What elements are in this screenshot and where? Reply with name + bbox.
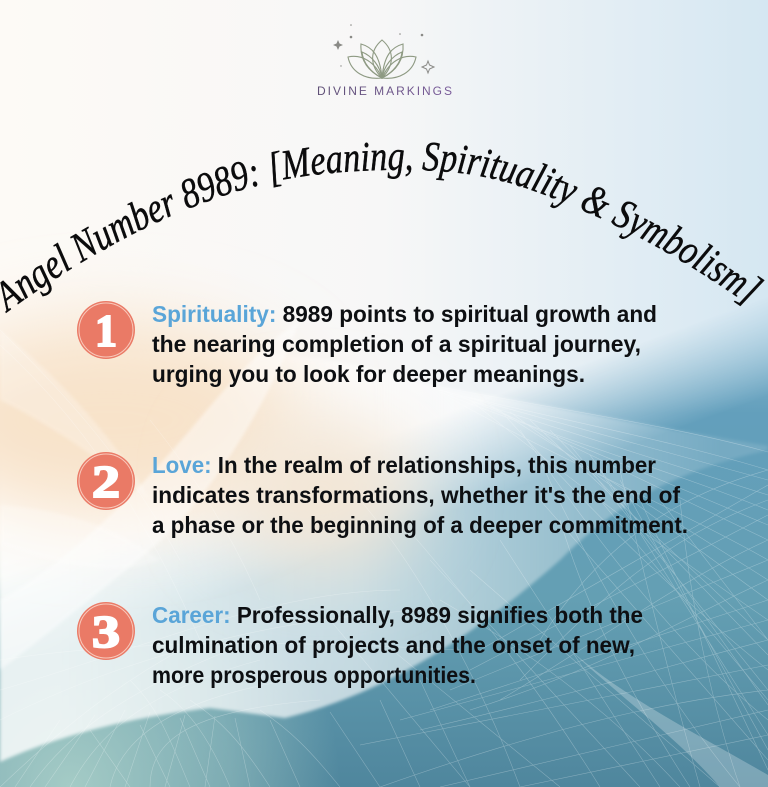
icon: number 2 badge	[77, 452, 135, 510]
item 3: career	[77, 602, 643, 688]
text: love: indicates transformations, whether it's the end of	[152, 482, 680, 508]
text: career	[152, 602, 643, 688]
text: love: a phase or the beginning of a deeper commitment.	[152, 512, 688, 538]
icon: number 1 badge	[77, 301, 135, 359]
text: career: culmination of projects and the onset of new,	[152, 632, 635, 658]
text: career: more prosperous opportunities.	[152, 662, 476, 688]
icon: lotus flower	[348, 40, 416, 78]
text: career: Career: Professionally, 8989 signifies both the	[152, 602, 643, 628]
background: fine white threads	[0, 330, 768, 787]
brand name: DIVINE MARKINGS	[317, 84, 452, 98]
text: love	[152, 452, 688, 538]
item 1: spirituality	[77, 301, 657, 387]
text: spirituality: the nearing completion of a spiritual journey,	[152, 331, 641, 357]
text: spirituality	[152, 301, 657, 387]
logo: Divine Markings	[317, 24, 452, 98]
title: curved script heading: Angel Number 8989: [Meaning, Spirituality & Symbolism]	[0, 142, 765, 314]
text: love: Love: In the realm of relationships, this number	[152, 452, 656, 478]
text: spirituality: urging you to look for deeper meanings.	[152, 361, 585, 387]
item 2: love	[77, 452, 688, 538]
background: translucent white veil	[0, 320, 768, 787]
icon: sparkles	[333, 24, 434, 73]
text: spirituality: Spirituality: 8989 points to spiritual growth and	[152, 301, 657, 327]
icon: number 3 badge	[77, 602, 135, 660]
icon: number 2 badge: 2	[92, 456, 120, 507]
icon: number 3 badge: 3	[92, 606, 120, 657]
icon: number 1 badge: 1	[95, 305, 117, 356]
